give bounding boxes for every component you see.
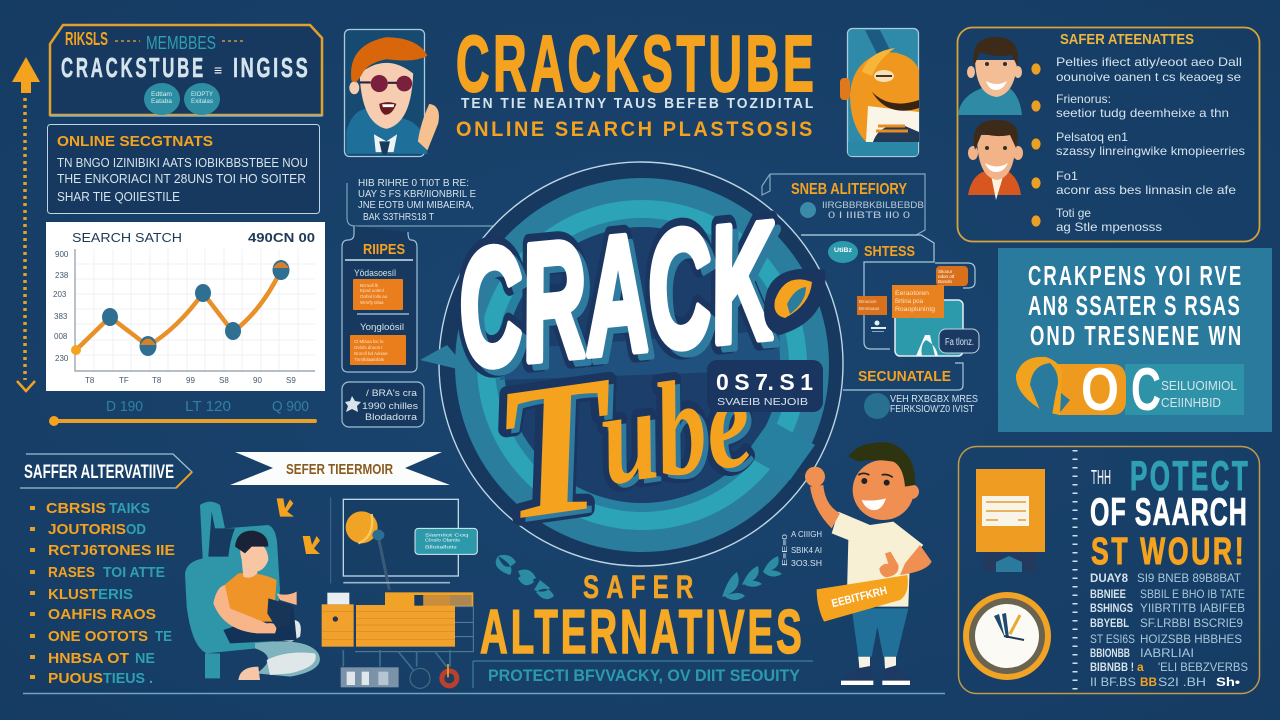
shoes [841,666,910,685]
y axis labels: 900 [55,250,69,259]
card: orange one: Wmrfy Dlaa [360,300,384,305]
heading: SNEB ALITEFIORY [791,181,907,198]
person [213,531,320,680]
wordmark: crack outline: CRACK [450,188,787,403]
list items: ONE OOTOTS [48,628,148,645]
body columns: Sh• [1216,675,1240,689]
heading: crackstube: CRACKSTUBE [61,52,203,83]
list items [46,500,175,687]
body columns: BIBNBB ! [1090,660,1134,674]
panel: safer alternatives people [958,28,1260,242]
hair [848,442,915,487]
teal tag [415,528,477,554]
bullets [1031,63,1041,227]
headline: CRAKPENS YOI RVE [1028,261,1241,292]
callout: left note text: HIB RIHRE 0 TI0T B RE: [358,177,469,189]
wordmark: tube extrusion: T [487,341,638,566]
panel: protect of search: THH [1091,467,1111,489]
card: top right: Bonoln [938,279,953,284]
wordmark: tube outline: T [482,337,633,562]
tv frame [343,499,458,576]
lamp [346,511,389,590]
portrait: man in teal [958,37,1022,115]
card: top right: ndon otf [938,274,955,279]
heading: ONLINE SECGTNATS [57,133,213,150]
logo strip [1016,356,1244,423]
small vertical note: SBIK4 AI [791,545,822,555]
heading: safer: SAFER [583,569,693,605]
x axis labels: S8 [219,376,229,385]
list text: aconr ass bes linnasin cle afe [1056,183,1236,197]
body columns [1090,571,1248,689]
body columns: BSHINGS [1090,601,1133,615]
pill: label [939,329,979,353]
icon: small separator: ≡ [214,62,222,78]
card: orange two: Nnnoll bd Adows [354,351,388,356]
badge: teal: UtiBz [834,248,852,254]
callout: left note text: BAK S3THRS18 T [363,211,434,223]
list items: TE [155,628,172,645]
card: teal window [895,300,963,356]
callout: left note text: JNE EOTB UMI MIBAEIRA, [358,199,474,211]
title: crackstube: CRACKSTUBE [456,19,814,108]
wordmark: crack extrusion: CRACK [456,194,793,409]
heading: RIIPES [363,241,405,258]
list text: seetior tudg deemheixe a thn [1056,106,1229,120]
y axis labels: 203 [53,290,67,299]
logo text: SEILUOIMIOL [1161,378,1237,393]
body columns: SBBIL E BHO IB TATE [1140,587,1245,601]
icon: globe [800,202,816,218]
small vertical note: A CIIIGH [791,529,822,539]
panel: safer alternative list [20,454,192,687]
x axis labels: 99 [186,376,195,385]
line chart: search [46,222,325,391]
wordmark: tube outline: ube [590,345,760,514]
tagline: protect privacy: PROTECTI BFVVACKY, OV DIIT SEOUITY [488,667,800,685]
card: orange one [353,279,403,310]
heading: insights: INGISS [233,53,308,84]
badges [144,83,220,115]
heading: SAFER ATEENATTES [1060,31,1194,48]
raised arm [810,485,840,528]
headline [1028,261,1241,352]
panel: protect of search [958,446,1260,694]
details: FEIRKSIOW'Z0 IVIST [890,404,974,415]
pill: label: Fa tlonz. [945,337,974,348]
socks [858,657,896,669]
tagline: ONLINE SEARCH PLASTSOSIS [456,118,812,141]
list items: TAIKS [109,500,150,517]
details: IIRGBBRBKBILBEBDB [822,200,924,210]
face [858,473,893,510]
sign [817,575,908,622]
badges: Edtlam [151,92,172,98]
rule two label: Yoŋgloósil [360,322,404,332]
heading: SHTESS [864,243,915,260]
subtitle: TEN TIE NEAITNY TAUS BEFEB TOZIDITAL [461,96,814,112]
list items: RCTJ6TONES IIE [48,542,175,559]
list items: OD [126,521,146,538]
panel: sites [801,235,979,356]
logo letter o: O [1081,356,1119,423]
icon: orange leaf [764,269,825,335]
badges: EIOPTY [191,92,213,98]
x axis labels: 90 [253,376,262,385]
panel: small note [342,382,424,427]
wordmark: tube extrusion: ube [595,349,765,518]
wordmark: tube: ube [590,345,760,514]
head [853,460,914,520]
card: small orange: Bmocion [859,299,877,304]
card: orange one: Bcmofi lk [360,283,379,288]
list text: Fo1 [1056,169,1078,183]
desk [322,592,473,670]
list text: oounoive oanen t cs keaoeg se [1056,70,1241,84]
y axis labels: 008 [54,332,68,341]
teal tag: Blloiialloiis [425,544,457,549]
shirt [832,512,923,607]
illustration: person in chair with desk [185,497,477,688]
badges: Exitalas [191,99,213,105]
desk accessories [341,664,459,688]
heading: st wour: ST WOUR! [1091,529,1244,572]
body text: SHAR TIE QOIIESTILE [57,189,180,204]
card: top right [936,266,968,286]
small vertical note: E≡E≡0 [782,534,789,566]
logo text [1161,378,1237,410]
details [822,200,924,220]
chart title: SEARCH SATCH [72,230,182,245]
card: orange one: Oohnl lolls ao [360,294,388,299]
headline: OND TRESNENE WN [1030,321,1241,352]
list text [1056,55,1245,234]
card: large orange: Roaoplunintg [895,307,935,313]
label: rikals: RIKSLS [65,29,108,49]
list text: Frienorus: [1056,92,1111,106]
card: large orange: Eeraotoren [895,291,929,297]
callout: left note text: UAY S FS KBR/IIONBRIL E [358,188,476,200]
body columns: II BF.BS [1090,675,1136,689]
illustration: boy with sign [805,442,932,685]
chair [185,502,280,678]
y axis labels: 383 [54,312,68,321]
badge: stats [707,360,823,412]
stats row below chart [106,398,309,415]
card: orange one: Epnd uotiml [360,288,384,293]
x axis labels: T8 [85,376,95,385]
leaf icons [277,498,320,554]
wordmark: crack: CRACK [450,188,787,403]
icon: teal shield [864,393,890,419]
wordmark: tube [482,337,760,562]
body columns: HOIZSBB HBBHES [1140,632,1242,646]
body text [57,155,308,204]
panel: crakpens blue [998,248,1272,432]
list text: Pelsatoq en1 [1056,130,1128,144]
badge: teal [828,241,858,263]
body columns: IABRLIAI [1140,646,1194,660]
y axis labels [53,250,69,363]
body columns: BB [1140,675,1157,689]
body text: TN BNGO IZINIBIKI AATS IOBIKBBSTBEE NOU [57,155,308,170]
body text: THE ENKORIACI NT 28UNS TOI HO SOITER [57,171,306,186]
wordmark: tube outline [482,337,760,562]
ribbon: safer: SEFER TIEERMOIR [286,461,393,478]
heading: SECUNATALE [858,368,951,385]
badges: Eataba [151,99,173,105]
list items: OAHFIS RAOS [48,606,156,623]
wordmark: tube extrusion [487,341,765,566]
list items: TOI ATTE [103,564,165,581]
panel: small note: Blodadorra [365,412,417,422]
logo letter c: C [1131,356,1161,423]
small vertical note [782,529,822,568]
details [890,394,978,415]
list items: HNBSA OT [48,650,129,667]
badge: stats: 0 S 7. S 1 [716,369,813,395]
body columns: BBNIEE [1090,587,1126,601]
icon: small figure [871,320,886,332]
panel: crackstube insights header [50,25,322,116]
panel: rules [342,226,417,372]
list text: Pelties ifiect atiy/eoot aeo Dall [1056,55,1242,69]
icon: orange document [976,469,1045,572]
x axis labels: S9 [286,376,296,385]
sign: EEBITFKRH [830,585,888,610]
heading: protect: POTECT [1130,453,1248,500]
teal tag: Clnslo Olantis [425,538,460,543]
card: small orange [857,296,887,315]
panel: central crack tube emblem [420,162,843,566]
list items: ERIS [98,586,133,603]
heading: of search: OF SAARCH [1090,489,1247,533]
card: orange two: Ovlols dnoos I [354,345,383,350]
fist [805,467,825,487]
stats row below chart: LT 120 [185,398,231,415]
portrait: left character with glasses [344,30,439,156]
portrait: man in orange [968,120,1023,200]
icon: clock [963,592,1051,680]
list items: KLUST [48,586,98,603]
body columns: BBIONBB [1090,646,1130,660]
heading: SAFFER ALTERVATIIVE [24,462,174,483]
hand [879,552,899,577]
details: 0 I IIIBTB II0 0 [828,210,910,220]
markers [71,260,290,356]
x axis labels: TF [119,376,129,385]
list items: PUOUS [48,670,103,687]
card: small orange: Bmntoaos [859,306,880,311]
body columns: ST ESI6S [1090,632,1135,646]
list text: Toti ge [1056,206,1091,220]
panel: secunatale [843,363,978,419]
list items: TIEUS . [103,670,153,687]
callout: left note text [347,177,495,226]
list text: szassy linreingwike kmopieerries [1056,144,1245,158]
chart value: 490CN 00 [248,230,315,245]
panel: online segments [48,124,320,214]
card: orange two: Tnmllolaalofals [354,357,385,362]
stats row below chart: Q 900 [272,398,309,415]
card: large orange [892,285,944,318]
lower arm [900,545,932,575]
list items: CBRSIS [46,500,106,517]
x axis labels: T8 [152,376,162,385]
panel: small note: / BRA's cra [366,388,417,398]
list items: RASES [48,564,95,581]
logo text: CEIINHBID [1161,395,1221,410]
card: orange two [350,335,406,365]
wordmark: tube: T [482,337,633,562]
body columns: 'ELI BEBZVERBS [1158,660,1248,674]
headline: AN8 SSATER S RSAS [1028,291,1240,322]
card: top right: Stioour [938,269,953,274]
stats row below chart: D 190 [106,398,143,415]
bullets [30,506,35,679]
y axis labels: 238 [55,271,69,280]
details: VEH RXBGBX MRES [890,394,978,405]
badge: stats: SVAEIB NEJOIB [717,396,808,408]
panel: small note: 1990 chilles [362,401,419,411]
body columns: S2I .BH [1158,675,1206,689]
card: orange two: Cl Mlaoa loc lo [354,339,384,344]
body columns: DUAY8 [1090,571,1128,585]
portrait: right orange character [840,28,919,156]
arrow: vertical orange axis [12,57,40,391]
teal tag: Siamiiot Coq [425,533,469,538]
label: members: MEMBBES [146,33,216,53]
body columns: YIIBRTITB IABIFEB [1140,601,1245,615]
x axis labels [85,376,296,385]
list items: NE [135,650,155,667]
small vertical note: 3O3.SH [791,558,822,568]
body columns: SF.LRBBI BSCRIE9 [1140,616,1243,630]
panel: sneb category [762,174,925,235]
body columns: a [1137,660,1144,674]
body columns: BBYEBL [1090,616,1129,630]
list text: ag Stle mpenosss [1056,220,1162,234]
orange slider [49,416,315,426]
card: large orange: Brtina poa [895,299,924,305]
jeans [852,608,908,657]
ribbon: safer [230,452,450,485]
rule one label: Yödasoesíl [354,268,396,278]
list items: JOUTORIS [48,521,126,538]
heading: alternatives: ALTERNATIVES [480,597,802,666]
line series [76,270,281,350]
y axis labels: 230 [55,354,69,363]
illustration: leaves [496,555,782,600]
body columns: SI9 BNEB 89B8BAT [1137,571,1242,585]
icon: a-frame tower [916,335,938,356]
